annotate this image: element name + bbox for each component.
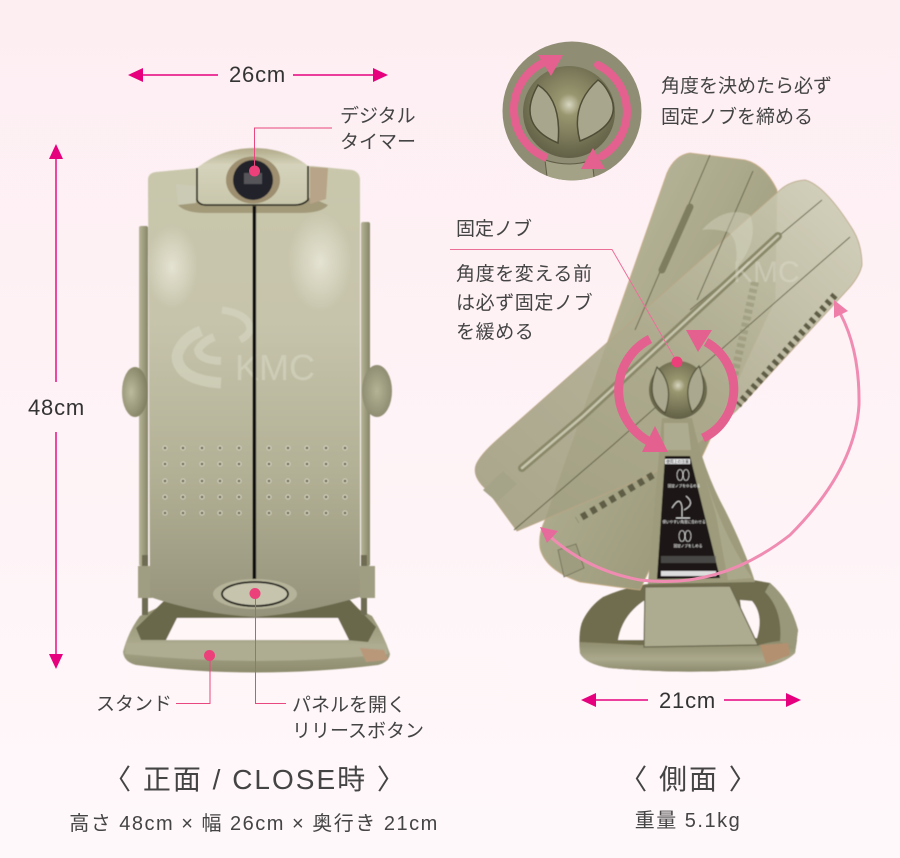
inset knob left leaf bbox=[530, 85, 559, 143]
callout: fixing knob: 固定ノブ bbox=[456, 217, 532, 240]
note: tighten knob bbox=[661, 75, 832, 128]
left knob bbox=[122, 367, 148, 417]
side watermark: KMC bbox=[733, 256, 800, 289]
panel highlights bbox=[146, 212, 352, 312]
heading: front view: 〈 正面 / CLOSE時 〉 bbox=[103, 764, 407, 795]
note: tighten knob: 角度を決めたら必ず bbox=[661, 75, 832, 97]
stand base front bbox=[123, 600, 390, 672]
top cap with timer bbox=[176, 148, 328, 213]
callout: fixing knob: を緩める bbox=[456, 321, 534, 343]
main body panel bbox=[148, 166, 360, 617]
dimension: height 48cm: 48cm bbox=[28, 395, 85, 420]
centre seam bbox=[252, 206, 256, 581]
black instruction label: 固定ノブをゆるめる bbox=[668, 483, 701, 488]
digital timer lens bbox=[226, 156, 280, 204]
callout: release button bbox=[250, 588, 424, 742]
speaker dots bbox=[163, 446, 347, 515]
dimension: depth 21cm: 21cm bbox=[659, 688, 716, 713]
side watermark bbox=[702, 212, 800, 289]
callout: fixing knob bbox=[450, 217, 682, 368]
callout: release button: パネルを開く bbox=[292, 695, 406, 716]
side stand base bbox=[579, 580, 798, 672]
note: tighten knob: 固定ノブを締める bbox=[661, 105, 813, 128]
callout: digital timer: タイマー bbox=[340, 131, 416, 153]
inset background bbox=[500, 40, 645, 185]
stand lower plate bbox=[644, 586, 758, 647]
inset stand neck bbox=[544, 160, 594, 180]
callout: fixing knob: 角度を変える前 bbox=[456, 263, 593, 285]
right knob bbox=[362, 365, 392, 417]
inset rotation arrows bbox=[514, 55, 627, 169]
black instruction label: 使用上の注意 bbox=[666, 459, 689, 464]
KMC watermark bbox=[177, 310, 315, 388]
heading: side view: 〈 側面 〉 bbox=[619, 764, 759, 795]
inset: knob close-up bbox=[500, 40, 645, 185]
black instruction label bbox=[657, 456, 720, 579]
stand pillar bbox=[648, 418, 755, 584]
side pivot knob bbox=[649, 361, 707, 419]
dimension: width 26cm: 26cm bbox=[229, 62, 286, 87]
callout: fixing knob: は必ず固定ノブ bbox=[456, 291, 593, 314]
inset knob right leaf bbox=[577, 80, 613, 141]
front dimensions text: 高さ 48cm × 幅 26cm × 奥行き 21cm bbox=[69, 812, 439, 835]
panel hinges bbox=[483, 471, 584, 577]
forward tilted panel bbox=[475, 180, 862, 531]
black instruction label: 固定ノブをしめる bbox=[674, 543, 703, 548]
tilt range arc arrow bbox=[540, 300, 859, 582]
panel seams and ribs bbox=[514, 155, 850, 530]
front view device bbox=[122, 148, 392, 672]
callout: stand bbox=[96, 650, 215, 715]
inset knob bbox=[523, 66, 615, 158]
dimension: height 48cm bbox=[28, 144, 85, 669]
dimension: depth 21cm bbox=[581, 688, 801, 713]
rotation arrows around pivot bbox=[619, 330, 734, 452]
callout: stand: スタンド bbox=[96, 693, 172, 715]
callout: release button: リリースボタン bbox=[292, 720, 424, 742]
release button bbox=[213, 579, 297, 609]
dimension: width 26cm bbox=[128, 62, 388, 87]
KMC watermark: KMC bbox=[235, 347, 315, 388]
black instruction label: 使いやすい角度に合わせる bbox=[662, 519, 706, 524]
side view device bbox=[475, 153, 862, 672]
callout: digital timer bbox=[249, 105, 416, 176]
weight text: 重量 5.1kg bbox=[635, 809, 741, 832]
callout: digital timer: デジタル bbox=[340, 105, 416, 127]
side rails bbox=[138, 222, 375, 615]
rear upright panel bbox=[540, 153, 777, 590]
